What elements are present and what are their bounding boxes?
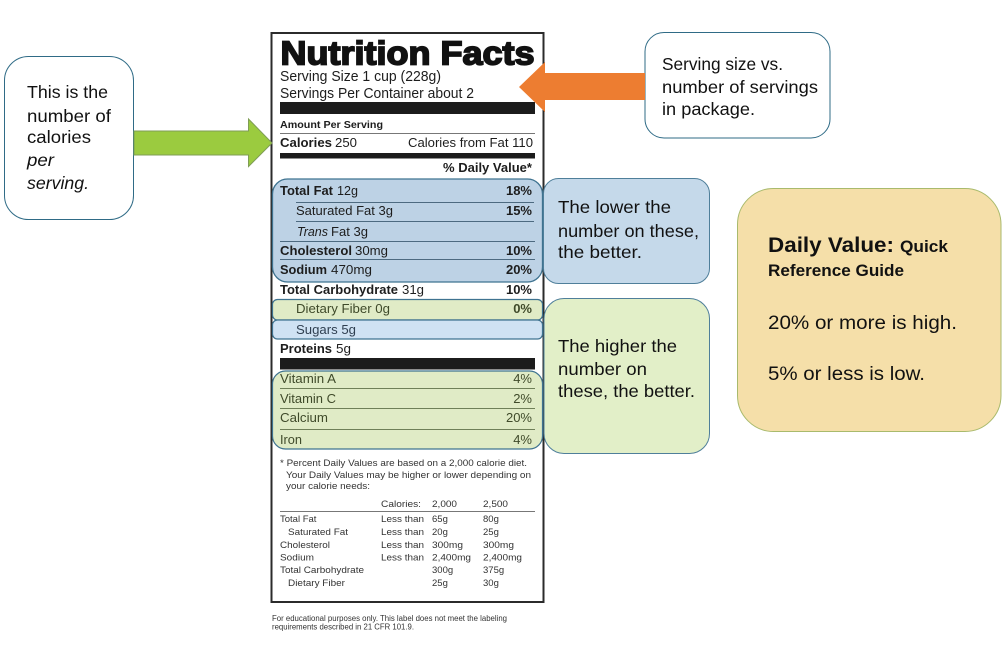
text: high threshold: 20% or more is high. — [768, 312, 957, 334]
callout: higher is better: these, the better. — [558, 381, 695, 401]
table: daily value limits: 25g — [483, 527, 499, 538]
callout: lower is better: The lower the — [558, 197, 671, 217]
row: proteins: Proteins — [280, 341, 332, 356]
table: daily value limits: 80g — [483, 514, 499, 525]
table: daily value limits: 65g — [432, 514, 448, 525]
table: daily value limits: Total Fat — [280, 514, 317, 525]
row: calories: Calories — [280, 135, 332, 150]
table: daily value limits — [280, 499, 535, 589]
callout: lower is better: number on these, — [558, 221, 699, 241]
callout: calories per serving — [4, 56, 134, 220]
highlight: nutrients to limit — [272, 179, 542, 282]
callout: higher is better: number on — [558, 359, 647, 379]
callout: serving size: in package. — [662, 99, 755, 119]
table: daily value limits: Less than — [381, 514, 424, 525]
thick bar: top separator — [280, 102, 535, 114]
highlight: nutrients to limit: Cholesterol — [280, 243, 352, 258]
callout: calories per serving: calories — [27, 127, 91, 147]
highlight: vitamins and minerals: Vitamin C — [280, 391, 336, 406]
table: daily value limits: Total Carbohydrate — [280, 565, 364, 576]
row: calories: 250 — [335, 135, 357, 150]
heading: daily value quick reference guide — [768, 234, 949, 280]
thick bar: vitamins separator — [280, 358, 535, 370]
highlight: dietary fiber — [272, 300, 542, 320]
heading: daily value quick reference guide: Quick — [900, 237, 949, 256]
text: educational disclaimer: requirements described in 21 CFR 101.9. — [272, 622, 414, 632]
highlight: dietary fiber: 0% — [513, 301, 532, 316]
table: daily value limits: 2,400mg — [483, 552, 522, 564]
callout: higher is better — [544, 298, 710, 454]
highlight: vitamins and minerals: 20% — [506, 410, 532, 425]
highlight: vitamins and minerals: Vitamin A — [280, 371, 336, 386]
highlight: nutrients to limit: Fat 3g — [331, 224, 368, 239]
text: serving information: Serving Size 1 cup (228g) — [280, 69, 441, 85]
table: daily value limits: 2,400mg — [432, 552, 471, 564]
highlight: nutrients to limit: Trans — [297, 224, 328, 239]
table: daily value limits: Less than — [381, 552, 424, 564]
table: daily value limits: 30g — [483, 578, 499, 589]
heading: daily value quick reference guide: Reference Guide — [768, 261, 904, 280]
highlight: vitamins and minerals: Iron — [280, 432, 302, 447]
highlight: vitamins and minerals: 2% — [513, 391, 532, 406]
table: daily value limits: Saturated Fat — [288, 527, 348, 538]
callout: lower is better: the better. — [558, 242, 642, 262]
callout: calories per serving: per — [26, 150, 55, 170]
row: calories — [280, 135, 533, 150]
text: educational disclaimer: For educational purposes only. This label does not meet the labeling — [272, 614, 507, 623]
callout: calories per serving: This is the — [27, 82, 108, 102]
row: total carbohydrate: 10% — [506, 282, 532, 297]
highlight: nutrients to limit: 15% — [506, 203, 532, 218]
highlight: nutrients to limit: 12g — [337, 183, 358, 198]
text: daily values footnote — [280, 458, 531, 492]
callout: calories per serving: serving. — [27, 173, 89, 193]
highlight: sugars: Sugars 5g — [296, 322, 356, 337]
table: daily value limits: 20g — [432, 527, 448, 538]
table: daily value limits: Calories: — [381, 499, 421, 510]
table: daily value limits: 300mg — [483, 540, 514, 551]
highlight: nutrients to limit: Sodium — [280, 262, 327, 277]
highlight: nutrients to limit: Total Fat — [280, 183, 334, 198]
highlight: vitamins and minerals: Calcium — [280, 410, 328, 425]
text: serving information — [280, 69, 474, 102]
text: amount per serving: Amount Per Serving — [280, 120, 383, 131]
panel: daily value quick reference guide — [738, 188, 1001, 432]
thick bar: calories separator — [280, 153, 535, 158]
row: calories: Calories from Fat 110 — [408, 135, 533, 150]
highlight: vitamins and minerals: 4% — [513, 432, 532, 447]
table: daily value limits: Less than — [381, 540, 424, 551]
callout: serving size — [645, 32, 830, 138]
highlight: vitamins and minerals — [272, 371, 542, 449]
table: daily value limits: 300mg — [432, 540, 463, 551]
text: percent daily value heading: % Daily Value* — [443, 160, 533, 175]
row: total carbohydrate — [280, 282, 532, 297]
text: educational disclaimer — [272, 614, 507, 632]
callout: calories per serving: number of — [27, 106, 111, 126]
callout: serving size: number of servings — [662, 77, 818, 97]
highlight: dietary fiber: Dietary Fiber 0g — [296, 301, 390, 316]
table: daily value limits: 375g — [483, 565, 504, 576]
callout: serving size: Serving size vs. — [662, 54, 783, 74]
panel: nutrition facts label — [272, 33, 544, 602]
row: proteins: 5g — [336, 341, 351, 356]
highlight: nutrients to limit: Saturated Fat 3g — [296, 203, 393, 218]
table: daily value limits: Dietary Fiber — [288, 578, 345, 589]
highlight: nutrients to limit: 470mg — [331, 262, 372, 277]
table: daily value limits: 300g — [432, 565, 453, 576]
highlight: nutrients to limit: 20% — [506, 262, 532, 277]
highlight: nutrients to limit: 10% — [506, 243, 532, 258]
text: daily values footnote: your calorie needs: — [286, 481, 370, 492]
heading: Nutrition Facts: Nutrition Facts — [280, 34, 534, 72]
highlight: sugars — [272, 320, 542, 339]
highlight: vitamins and minerals: 4% — [513, 371, 532, 386]
heading: daily value quick reference guide: Daily Value: — [768, 234, 894, 257]
text: daily values footnote: * Percent Daily Values are based on a 2,000 calorie diet. — [280, 458, 527, 469]
arrow: orange arrow to serving size — [519, 62, 645, 112]
row: total carbohydrate: Total Carbohydrate — [280, 282, 398, 297]
arrow: green arrow to calories — [134, 119, 272, 166]
callout: lower is better — [544, 178, 710, 284]
text: daily values footnote: Your Daily Values may be higher or lower depending on — [286, 470, 531, 481]
table: daily value limits: 2,000 — [432, 499, 457, 510]
text: serving information: Servings Per Container about 2 — [280, 86, 474, 102]
table: daily value limits: Sodium — [280, 552, 314, 564]
text: low threshold: 5% or less is low. — [768, 363, 925, 385]
callout: higher is better: The higher the — [558, 336, 677, 356]
highlight: nutrients to limit: 30mg — [355, 243, 388, 258]
row: total carbohydrate: 31g — [402, 282, 424, 297]
table: daily value limits: 25g — [432, 578, 448, 589]
table: daily value limits: Cholesterol — [280, 540, 330, 551]
highlight: nutrients to limit: 18% — [506, 183, 532, 198]
table: daily value limits: 2,500 — [483, 499, 508, 510]
table: daily value limits: Less than — [381, 527, 424, 538]
